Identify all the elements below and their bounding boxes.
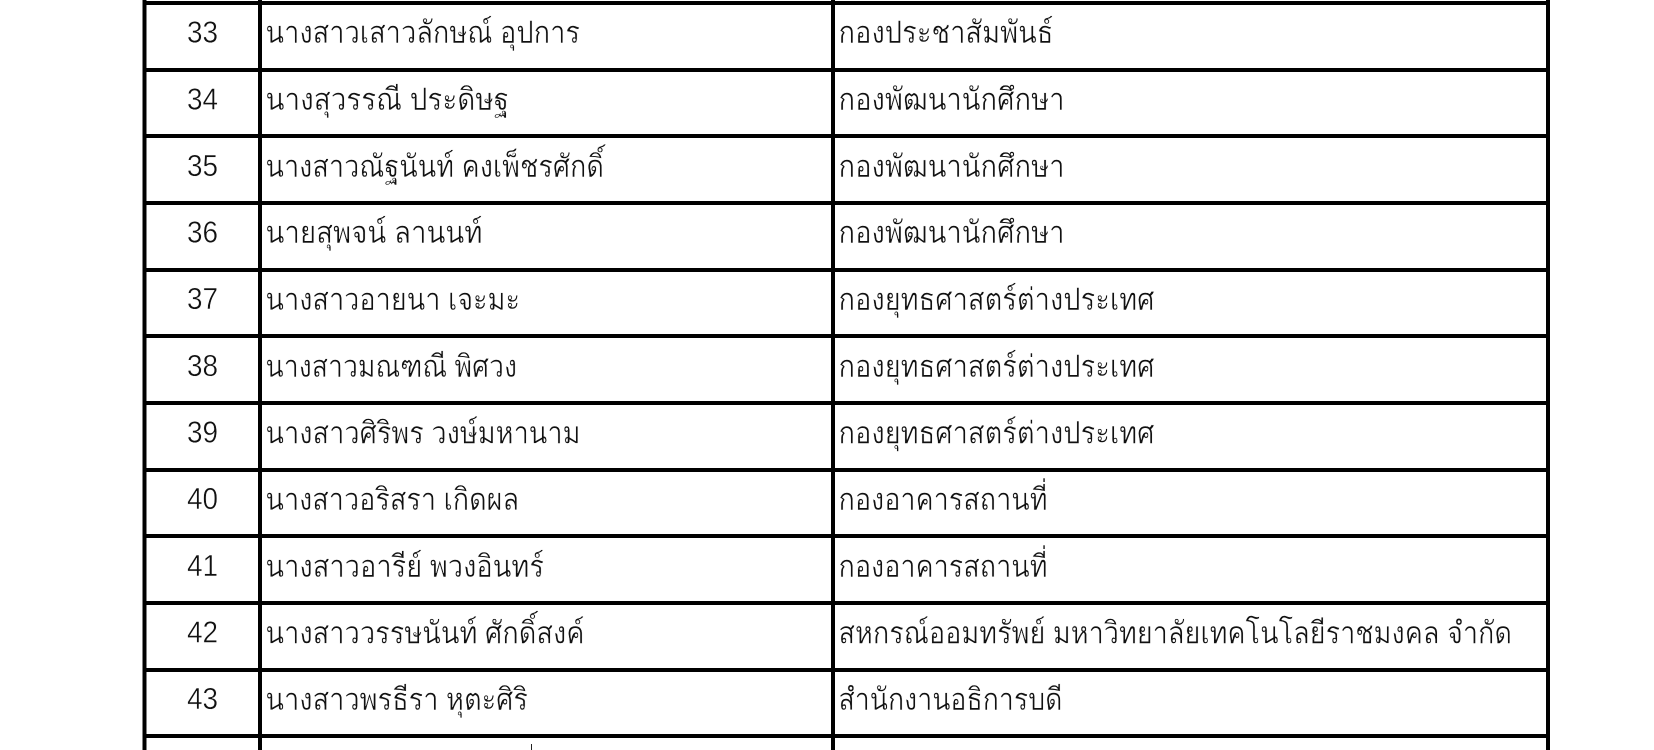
row 40 — [187, 478, 1048, 517]
row 41: กองอาคารสถานที่ — [838, 545, 1048, 584]
row 38 — [187, 348, 1155, 386]
row 35: 35 — [187, 148, 218, 183]
row 36 — [187, 214, 1064, 252]
row 43: นางสาวพรธีรา หุตะศิริ — [266, 682, 528, 719]
row 41: นางสาวอารีย์ พวงอินทร์ — [266, 549, 544, 584]
row 38: 38 — [187, 348, 218, 383]
row 33: นางสาวเสาวลักษณ์ อุปการ — [266, 15, 580, 52]
row 36: 36 — [187, 214, 218, 250]
row 42: 42 — [187, 614, 218, 650]
row 43 — [187, 681, 1062, 719]
row 41: 41 — [187, 548, 218, 583]
clipped tone mark of next row — [531, 744, 532, 750]
row 37: 37 — [187, 281, 218, 316]
row 35 — [187, 143, 1064, 185]
row 33: กองประชาสัมพันธ์ — [838, 15, 1054, 50]
row 38: กองยุทธศาสตร์ต่างประเทศ — [838, 349, 1155, 386]
row 39: กองยุทธศาสตร์ต่างประเทศ — [838, 416, 1155, 452]
row 34: 34 — [187, 82, 218, 116]
row 42 — [187, 610, 1512, 650]
row 35: กองพัฒนานักศึกษา — [838, 149, 1064, 184]
row 35: นางสาวณัฐนันท์ คงเพ็ชรศักดิ์ — [266, 143, 606, 185]
row 33: 33 — [187, 14, 218, 50]
row 42: นางสาววรรษนันท์ ศักดิ์สงค์ — [266, 610, 584, 650]
row 39: นางสาวศิริพร วงษ์มหานาม — [266, 416, 580, 450]
row 41 — [187, 545, 1048, 584]
row 36: นายสุพจน์ ลานนท์ — [266, 215, 482, 252]
row 37: กองยุทธศาสตร์ต่างประเทศ — [838, 282, 1155, 319]
row 40: นางสาวอริสรา เกิดผล — [266, 482, 519, 517]
row 36: กองพัฒนานักศึกษา — [838, 215, 1064, 250]
row 42: สหกรณ์ออมทรัพย์ มหาวิทยาลัยเทคโนโลยีราชมงคล จำกัด — [838, 616, 1512, 650]
row 43: 43 — [187, 681, 218, 716]
row 37: นางสาวอายนา เจะมะ — [266, 282, 520, 317]
row 40: กองอาคารสถานที่ — [838, 478, 1048, 517]
row 34: กองพัฒนานักศึกษา — [838, 82, 1064, 117]
row 37 — [187, 281, 1155, 319]
row 34 — [187, 82, 1064, 119]
row 34: นางสุวรรณี ประดิษฐ — [266, 82, 509, 119]
row 43: สำนักงานอธิการบดี — [838, 682, 1062, 717]
row 40: 40 — [187, 481, 218, 516]
row 39 — [187, 414, 1155, 452]
row 33 — [187, 14, 1054, 52]
row 38: นางสาวมณฑณี พิศวง — [266, 349, 517, 384]
row 39: 39 — [187, 414, 218, 450]
